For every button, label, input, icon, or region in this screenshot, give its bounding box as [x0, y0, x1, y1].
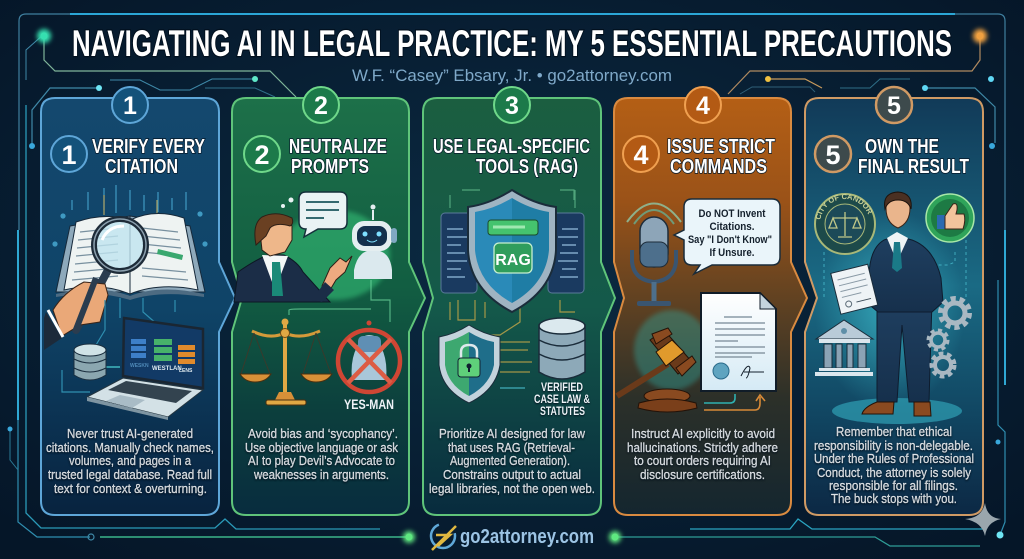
heading: COMMANDS — [670, 156, 767, 178]
heading — [858, 136, 969, 178]
number badge heading — [815, 136, 851, 172]
footer logo — [431, 524, 594, 550]
icon: court seal: CITY OF CANDOR — [816, 194, 872, 220]
icon: digital particles — [53, 185, 207, 246]
icon: laptop: WESTLAN — [152, 366, 182, 372]
icon: certification document — [701, 293, 776, 391]
heading: PROMPTS — [291, 156, 369, 178]
heading — [289, 136, 387, 178]
speech bubble: Citations. — [710, 221, 754, 233]
speech bubble: Do NOT Invent — [698, 208, 766, 220]
glow — [634, 310, 710, 390]
body text: Augmented Generation). — [450, 453, 570, 468]
number badge top: 1 — [123, 92, 137, 120]
body text: AI to play Devil’s Advocate to — [248, 453, 395, 468]
glow — [815, 210, 965, 410]
icon: scales of justice — [240, 318, 332, 405]
arrows — [704, 394, 765, 410]
sparkle — [965, 503, 1001, 536]
icon: lawyer — [234, 214, 330, 302]
heading: VERIFY EVERY — [92, 136, 206, 158]
icon: hand — [44, 278, 108, 350]
number badge heading: 4 — [633, 140, 649, 170]
icon: right screen — [548, 213, 584, 293]
body text: Remember that ethical — [836, 424, 952, 439]
subtitle: W.F. “Casey” Ebsary, Jr. • go2attorney.com — [352, 66, 672, 85]
number badge heading — [623, 136, 659, 172]
body text: to court orders requiring AI — [634, 453, 771, 468]
footer url: go2attorney.com — [460, 526, 594, 548]
number badge top — [876, 87, 912, 123]
body text: Use objective language or ask — [245, 440, 399, 455]
body text: Prioritize AI designed for law — [439, 426, 586, 441]
number badge heading: 2 — [254, 140, 270, 170]
number badge top — [685, 87, 721, 123]
panel 2: neutralize prompts — [232, 87, 425, 515]
icon: court seal — [814, 193, 876, 255]
body text — [245, 426, 399, 482]
icon: gavel — [617, 328, 696, 396]
label: verified case law: CASE LAW & — [534, 392, 590, 406]
body text: legal libraries, not the open web. — [429, 481, 595, 496]
panel 1: verify every citation — [41, 87, 235, 515]
body text: citations. Manually check names, — [46, 440, 214, 455]
panel 5: own the final result — [804, 86, 984, 516]
icon: magnifying glass — [76, 219, 146, 330]
icon: laptop — [87, 318, 203, 420]
dashed traces — [824, 240, 966, 300]
body text: volumes, and pages in a — [69, 453, 192, 468]
number badge top: 2 — [314, 92, 328, 120]
number badge heading — [244, 136, 280, 172]
heading: OWN THE — [865, 136, 939, 158]
icon: thumbs up — [926, 194, 974, 242]
glow — [280, 210, 390, 300]
icon: microphone — [627, 204, 681, 306]
label: yes-man: YES-MAN — [344, 396, 394, 412]
body text: Avoid bias and ‘sycophancy’. — [248, 426, 398, 441]
icon: logo mark — [431, 524, 456, 550]
label: verified case law: STATUTES — [540, 404, 585, 418]
number badge top — [112, 87, 148, 123]
number badge top: 5 — [887, 92, 901, 120]
icon: database — [539, 318, 585, 379]
body text — [627, 426, 778, 482]
number badge heading: 1 — [61, 140, 77, 170]
heading — [433, 136, 590, 178]
heading: FINAL RESULT — [858, 156, 969, 178]
body text — [814, 424, 974, 506]
number badge top — [303, 87, 339, 123]
heading: CITATION — [105, 156, 178, 178]
panel 3: legal-specific tools — [423, 87, 615, 515]
body text: trusted legal database. Read full — [48, 467, 212, 482]
icon: left screen — [441, 213, 477, 293]
speech bubble — [281, 192, 347, 237]
icon: laptop: WESKN — [130, 363, 149, 369]
icon: gesturing hand — [312, 256, 352, 302]
body text: Instruct AI explicitly to avoid — [631, 426, 775, 441]
icon: lock shield — [439, 325, 500, 403]
label: verified case law: VERIFIED — [541, 380, 583, 394]
circuit traces — [62, 298, 175, 392]
icon: laptop: LENS — [179, 368, 193, 374]
icon: signed document — [831, 264, 878, 314]
body text: Conduct, the attorney is solely — [817, 465, 972, 480]
panel 4: issue strict commands — [614, 87, 807, 515]
body text: The buck stops with you. — [831, 491, 957, 506]
icon: open book — [56, 213, 205, 300]
body text: Under the Rules of Professional — [814, 451, 974, 466]
number badge top: 3 — [505, 92, 519, 120]
body text: weaknesses in arguments. — [253, 467, 389, 482]
heading — [92, 136, 206, 178]
body text: disclosure certifications. — [640, 467, 765, 482]
heading: USE LEGAL-SPECIFIC — [433, 136, 590, 158]
icon: courthouse — [815, 320, 873, 376]
number badge heading — [51, 136, 87, 172]
icon: lawyer standing — [832, 192, 962, 424]
speech bubble: If Unsure. — [710, 247, 754, 259]
heading: ISSUE STRICT — [667, 136, 775, 158]
heading — [667, 136, 775, 178]
icon: robot — [352, 204, 397, 279]
body text — [429, 426, 595, 496]
icon: database — [74, 344, 106, 380]
number badge top — [494, 87, 530, 123]
number badge heading: 5 — [825, 140, 841, 170]
body text — [46, 426, 214, 496]
circuit traces — [450, 190, 575, 388]
icon: large shield — [468, 190, 556, 312]
body text: responsibility is non-delegable. — [814, 438, 973, 453]
label: verified case law — [534, 380, 590, 418]
body text: that uses RAG (Retrieval- — [448, 440, 575, 455]
icon: sound block — [638, 389, 697, 412]
icon: large shield: RAG — [495, 252, 531, 269]
icon: gears — [928, 299, 969, 376]
speech bubble: Say "I Don't Know" — [688, 234, 772, 246]
connector — [289, 280, 390, 322]
heading: NEUTRALIZE — [289, 136, 387, 158]
body text: hallucinations. Strictly adhere — [627, 440, 778, 455]
heading: TOOLS (RAG) — [476, 156, 578, 178]
body text: responsible for all filings. — [829, 478, 958, 493]
number badge top: 4 — [696, 92, 710, 120]
body text: Never trust AI-generated — [67, 426, 193, 441]
body text: Constrains output to actual — [443, 467, 581, 482]
icon: no robot yes-man — [338, 320, 400, 392]
body text: text for context & overturning. — [54, 481, 207, 496]
speech bubble — [674, 199, 780, 274]
